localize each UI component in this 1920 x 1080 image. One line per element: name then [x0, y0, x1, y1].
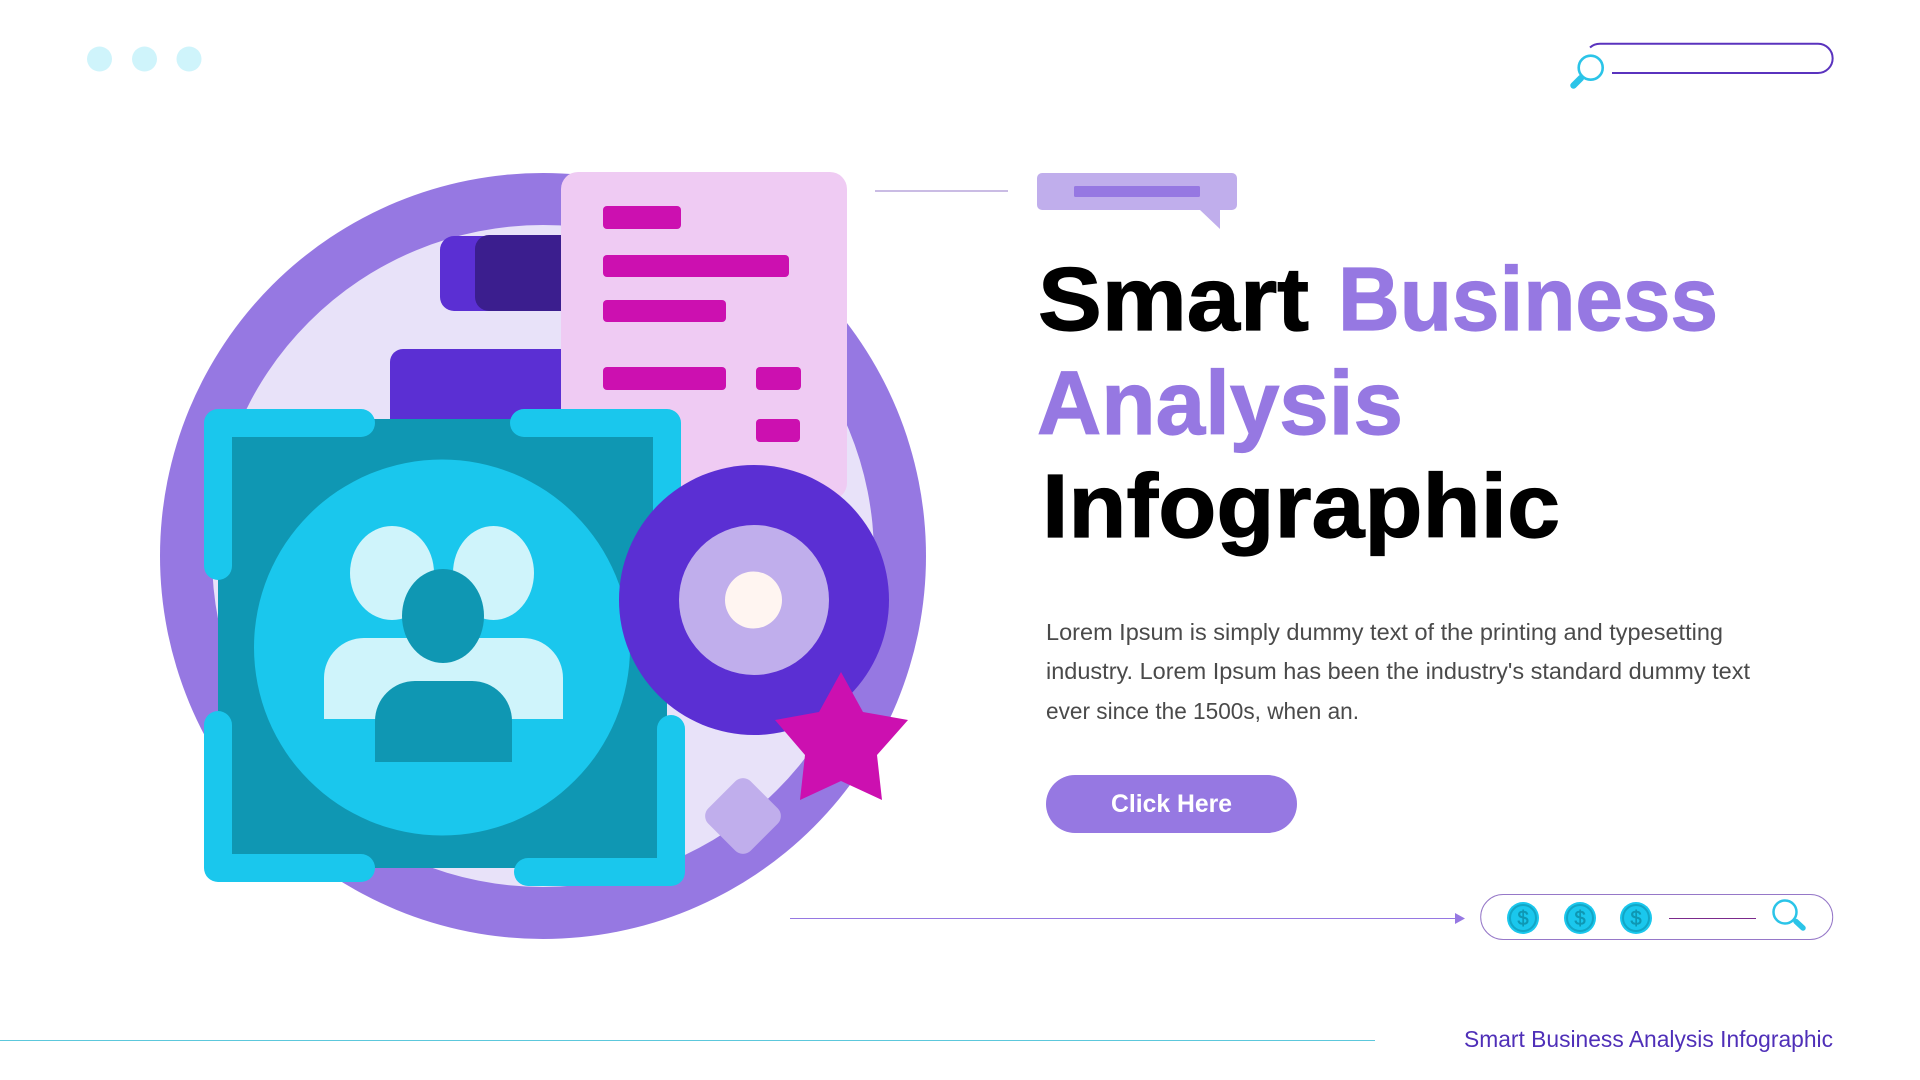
search bar top right — [1574, 44, 1833, 86]
footer line — [0, 1040, 1375, 1042]
user circle icon — [254, 460, 630, 836]
coin 3 — [1620, 902, 1652, 934]
pill divider — [1669, 918, 1756, 920]
footer text: Smart Business Analysis Infographic — [1464, 1026, 1833, 1052]
title: Analysis — [1037, 354, 1403, 454]
coin 1 — [1507, 902, 1539, 934]
coin 2 — [1564, 902, 1596, 934]
scan frame corners — [218, 423, 671, 872]
body text — [1046, 619, 1751, 724]
body text: Lorem Ipsum is simply dummy text of the printing and typesetting — [1046, 619, 1723, 645]
button — [1046, 775, 1297, 833]
coin 1: $ — [1517, 908, 1529, 930]
front user — [375, 569, 512, 762]
coin 2: $ — [1574, 908, 1586, 930]
arrow — [790, 913, 1465, 924]
coin search pill — [1481, 894, 1833, 940]
title: Business — [1338, 250, 1718, 350]
window dots — [87, 46, 202, 72]
document bars — [603, 206, 801, 442]
main illustration — [160, 172, 926, 939]
title: Smart — [1038, 250, 1309, 350]
back users — [324, 526, 563, 719]
document card — [561, 172, 847, 500]
outer ring — [160, 173, 926, 939]
coin 3: $ — [1630, 908, 1642, 930]
inner light disc — [212, 225, 874, 887]
teal scan square — [218, 419, 667, 868]
body text: ever since the 1500s, when an. — [1046, 698, 1359, 724]
body text: industry. Lorem Ipsum has been the industry's standard dummy text — [1046, 658, 1751, 684]
title: Infographic — [1042, 457, 1560, 557]
button: Click Here — [1111, 790, 1232, 818]
purple tabs behind document — [390, 235, 580, 434]
speech bubble — [1037, 173, 1237, 229]
star — [775, 672, 908, 800]
connector line top — [875, 190, 1008, 192]
icon: magnifier pill — [1774, 900, 1803, 928]
icon: magnifier top — [1574, 56, 1603, 86]
title — [1037, 250, 1718, 557]
diamond — [701, 774, 785, 858]
target circle — [619, 465, 889, 735]
